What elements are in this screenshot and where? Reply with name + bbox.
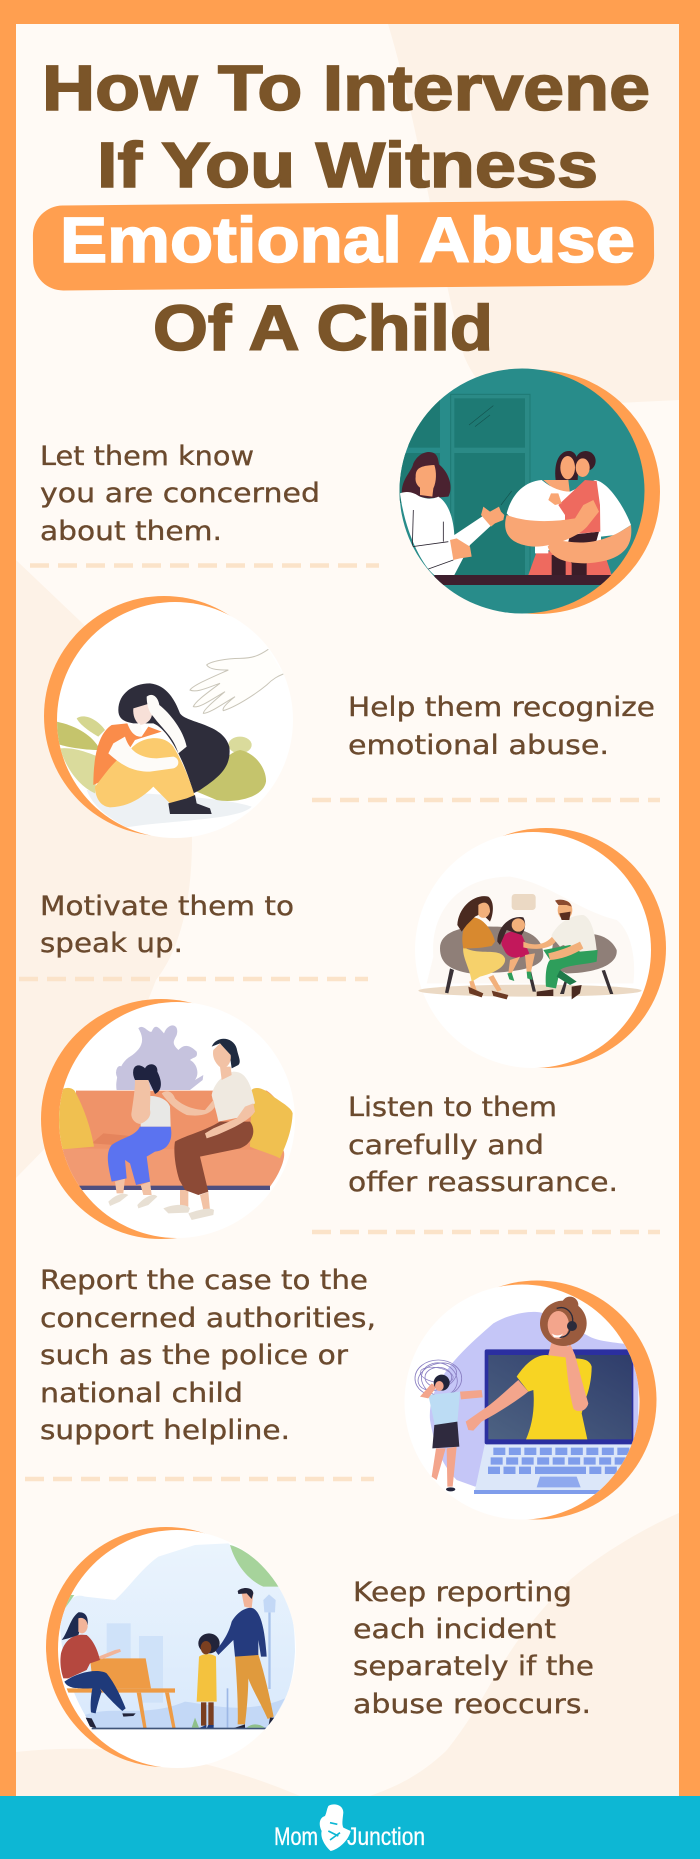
logo: MomJunction: Mom (274, 1823, 318, 1851)
title (33, 52, 654, 364)
step 6 illustration: adults and child in a park (46, 1527, 296, 1768)
step 6 text: separately if the (353, 1651, 594, 1682)
step 3 text: speak up. (40, 928, 183, 959)
divider (25, 1477, 374, 1481)
step 6 text: each incident (353, 1614, 556, 1645)
title: If You Witness (97, 129, 598, 201)
step 2 text: emotional abuse. (348, 730, 609, 761)
divider (312, 798, 660, 802)
step 3 text: Motivate them to (40, 891, 294, 922)
title: Emotional Abuse (60, 204, 635, 276)
logo: MomJunction: Junction (347, 1823, 425, 1851)
step 5 illustration: helpline on laptop (404, 1280, 656, 1520)
step 1 text: Let them know (40, 441, 254, 472)
step 2 illustration: sad woman and reaching hand (44, 596, 293, 838)
step 4 illustration: mother comforting child on sofa (41, 999, 295, 1239)
divider (19, 977, 368, 981)
step 4 text: carefully and (348, 1130, 544, 1161)
step 6 text (353, 1577, 594, 1720)
step 1 text: about them. (40, 516, 222, 547)
step 5 text (40, 1265, 376, 1446)
step 5 text: concerned authorities, (40, 1303, 376, 1334)
step 1 text (40, 441, 320, 547)
step 6 text: Keep reporting (353, 1577, 572, 1608)
divider (30, 563, 379, 568)
step 6 text: abuse reoccurs. (353, 1689, 591, 1720)
step 5 text: support helpline. (40, 1415, 290, 1446)
logo: MomJunction (274, 1804, 425, 1851)
step 1 text: you are concerned (40, 478, 320, 509)
step 5 text: such as the police or (40, 1340, 349, 1371)
step 3 illustration: family on armchairs (415, 828, 666, 1068)
step 4 text: Listen to them (348, 1092, 557, 1123)
divider (312, 1230, 660, 1234)
title: How To Intervene (42, 52, 650, 124)
step 4 text (348, 1092, 618, 1198)
step 2 text (348, 692, 655, 761)
step 3 text (40, 891, 294, 959)
title: Of A Child (153, 292, 493, 364)
step 5 text: Report the case to the (40, 1265, 368, 1296)
step 4 text: offer reassurance. (348, 1167, 618, 1198)
step 2 text: Help them recognize (348, 692, 655, 723)
footer band (0, 1796, 700, 1859)
step 5 text: national child (40, 1378, 243, 1409)
step 1 illustration: doctor and mother with child (398, 368, 660, 614)
